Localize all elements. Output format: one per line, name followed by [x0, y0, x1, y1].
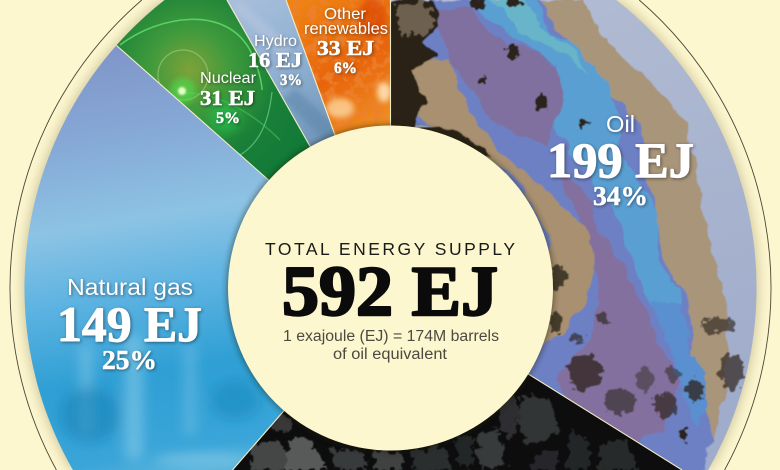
wedge: hydro [226, 0, 334, 146]
center note: 1 exajoule (EJ) = 174M barrels [283, 328, 499, 345]
center circle shadow [226, 124, 554, 452]
label: oil: 34% [593, 181, 648, 211]
wedge dividers [116, 0, 682, 470]
label: natural gas: 149 EJ [57, 296, 202, 352]
label: oil: 199 EJ [547, 132, 694, 188]
label: nuclear: 31 EJ [200, 86, 255, 110]
nuclear glow rings [120, 19, 280, 155]
label: natural gas: 25% [102, 345, 157, 375]
wedge: other renewables [286, 0, 390, 135]
label: oil [547, 111, 694, 211]
label: hydro: Hydro [254, 33, 297, 50]
label: other renewables: 6% [334, 60, 357, 77]
center note: of oil equivalent [333, 346, 448, 363]
oil slick dark blobs [470, 0, 744, 443]
center note [283, 328, 499, 363]
label: other renewables: renewables [304, 20, 388, 38]
wedge: natural gas [20, 40, 290, 470]
center heading: TOTAL ENERGY SUPPLY [265, 239, 515, 259]
label: natural gas: Natural gas [67, 274, 193, 300]
label: other renewables [304, 6, 388, 77]
label: oil: Oil [606, 111, 635, 137]
center total value: 592 EJ [282, 253, 498, 331]
wedge: oil [385, 0, 765, 470]
label: other renewables: Other [324, 6, 367, 23]
label: hydro [248, 33, 302, 89]
wedge: coal [233, 374, 681, 470]
gas flame streaks [60, 335, 260, 467]
label: natural gas [57, 274, 202, 375]
label: hydro: 16 EJ [248, 48, 302, 72]
label: other renewables: 33 EJ [317, 36, 374, 60]
coal rocks [250, 395, 640, 470]
label: nuclear [200, 70, 257, 127]
label: nuclear: Nuclear [200, 70, 257, 87]
label: hydro: 3% [280, 72, 302, 89]
wedge: nuclear [116, 0, 310, 180]
label: nuclear: 5% [216, 110, 240, 127]
center circle [228, 126, 553, 450]
